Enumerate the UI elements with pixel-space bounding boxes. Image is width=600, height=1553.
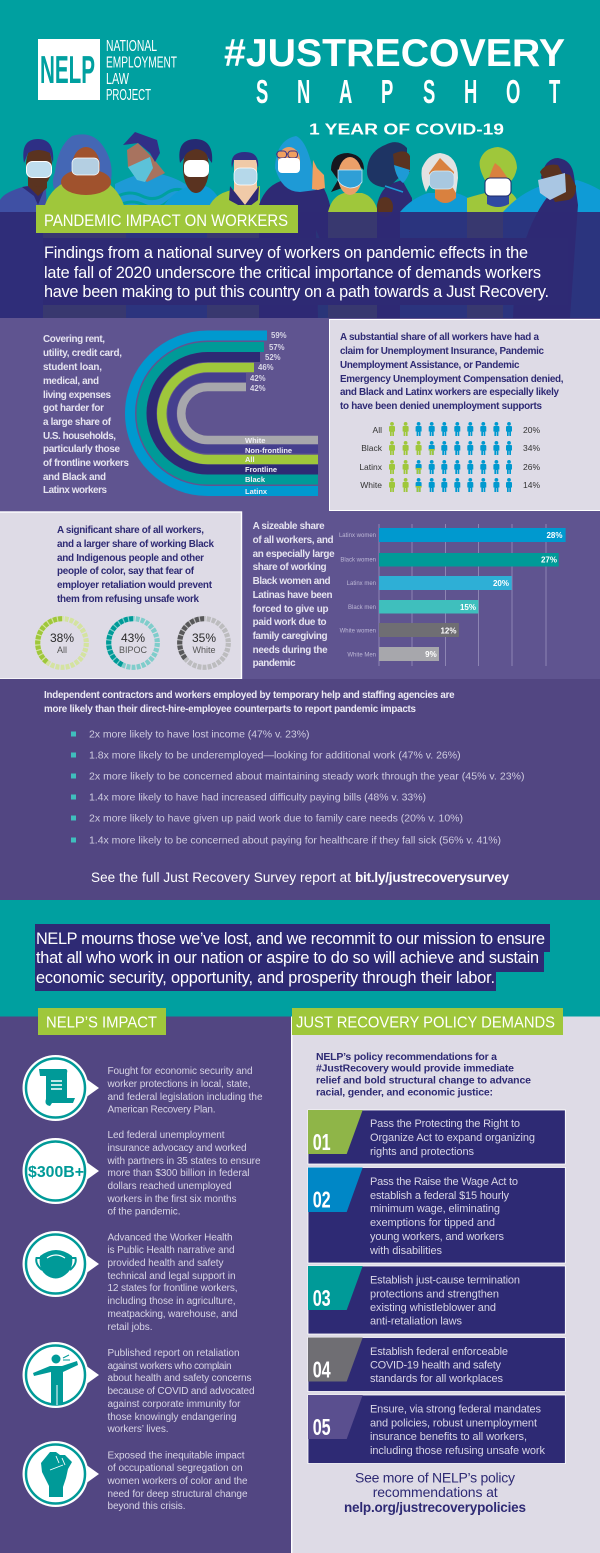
radial bar chart: Black <box>245 475 266 484</box>
text block: of frontline workers <box>43 458 130 469</box>
radial bar chart: 57% <box>269 343 285 352</box>
card 01: Organize Act to expand organizing <box>370 1132 535 1144</box>
text block: Advanced the Worker Health <box>108 1232 232 1244</box>
text block <box>57 525 214 605</box>
intro text: racial, gender, and economic justice: <box>316 1087 493 1099</box>
radial bar chart: 46% <box>258 363 274 372</box>
worker 3 <box>115 132 190 318</box>
logo: NELP: PROJECT <box>106 87 151 104</box>
text block: 12 states for frontline workers, <box>108 1283 238 1294</box>
section heading: pandemic impact on workers <box>36 205 298 233</box>
donut: all 38%: All <box>57 645 67 655</box>
panel: teal statement <box>0 900 600 1017</box>
card 02: Pass the Raise the Wage Act to <box>370 1176 518 1188</box>
header background <box>0 0 600 320</box>
bullet list: 1.8x more likely to be underemployed—looking for additional work (47% v. 26%) <box>89 750 461 762</box>
bar chart: Black men <box>348 605 376 611</box>
icon: raised fist <box>22 1441 99 1507</box>
panel: independent contractors <box>0 679 600 900</box>
pictogram chart: Latinx <box>359 462 383 472</box>
intro text box: have been making to put this country on a path towards a Just Recovery. <box>44 283 549 301</box>
subtitle: snapshot: P <box>381 73 393 110</box>
bar chart <box>339 524 566 666</box>
bar chart: White Men <box>347 652 376 658</box>
logo: NELP: NELP <box>40 49 95 92</box>
card 04: standards for all workplaces <box>370 1373 504 1385</box>
section heading: pandemic impact on workers: PANDEMIC IMPACT ON WORKERS <box>44 212 288 230</box>
bullet list: 2x more likely to have given up paid work due to family care needs (20% v. 10%) <box>89 812 463 824</box>
text block <box>106 1348 254 1435</box>
text block <box>253 521 335 669</box>
intro text <box>316 1051 531 1099</box>
subtitle: snapshot: H <box>464 73 477 110</box>
text block: against corporate immunity for <box>108 1399 241 1410</box>
pictogram chart <box>359 422 540 492</box>
survey link <box>91 870 509 885</box>
text block: Covering rent, <box>43 334 105 345</box>
subtitle: snapshot <box>256 73 561 110</box>
text block: utility, credit card, <box>43 348 122 359</box>
icon: scroll <box>22 1055 99 1121</box>
text block: and Black and Latinx workers are especially likely <box>340 387 560 398</box>
bar chart: 15% <box>460 603 476 612</box>
text block: employer retaliation would prevent <box>57 580 213 591</box>
bar chart: White women <box>340 628 376 634</box>
card 05: and policies, robust unemployment <box>370 1418 537 1430</box>
text block <box>106 1066 263 1116</box>
icon: face mask <box>22 1231 99 1297</box>
text block: needs during the <box>253 645 328 656</box>
card 03 <box>308 1266 565 1334</box>
text block <box>106 1450 248 1512</box>
donut: white 35%: 35% <box>192 631 216 645</box>
pictogram chart: 34% <box>523 443 540 453</box>
text block: women workers of color and the <box>106 1476 248 1487</box>
bar chart: 9% <box>425 650 437 659</box>
text block <box>106 1130 261 1218</box>
icon: worker speaking out <box>22 1342 99 1408</box>
heading <box>38 1008 166 1035</box>
text block: technical and legal support in <box>108 1271 236 1282</box>
survey link: bit.ly/justrecoverysurvey <box>355 870 509 885</box>
text block: more likely than their direct-hire-employee counterparts to report pandemic impacts <box>44 704 417 715</box>
subtitle: snapshot: A <box>339 73 352 110</box>
text block: Emergency Unemployment Compensation denied, <box>340 374 564 385</box>
card 04: 04 <box>313 1356 331 1382</box>
bar chart: 27% <box>541 556 557 564</box>
text block: with partners in 35 states to ensure <box>106 1156 261 1167</box>
text block: about health and safety concerns <box>108 1373 252 1384</box>
section backgrounds <box>0 318 600 679</box>
card 05 <box>308 1395 565 1464</box>
dark band over illustration <box>0 212 600 318</box>
text block: of all workers, and <box>253 535 334 546</box>
pictogram chart: 14% <box>523 480 540 490</box>
subtitle: snapshot: S <box>423 73 435 110</box>
text block <box>43 334 130 496</box>
icon: $300B+: $300B+ <box>28 1164 84 1181</box>
text block: A substantial share of all workers have had a <box>340 332 540 343</box>
text block: workers in the first six months <box>106 1194 236 1205</box>
text block: a large share of <box>43 417 112 428</box>
text block: people of color, say that fear of <box>57 566 195 577</box>
card 02: establish a federal $15 hourly <box>370 1190 510 1202</box>
card 05: Ensure, via strong federal mandates <box>370 1404 542 1416</box>
text block: living expenses <box>43 390 112 401</box>
radial bar chart: 52% <box>265 353 281 362</box>
worker 1 <box>0 139 53 318</box>
subtitle: snapshot: O <box>506 73 520 110</box>
text block: Black women and <box>253 576 331 587</box>
text block: Independent contractors and workers employed by temporary help and staffing agencies are <box>44 690 455 701</box>
card 02: young workers, and workers <box>370 1231 504 1243</box>
card 02: 02 <box>313 1186 331 1212</box>
worker 2 <box>43 134 126 318</box>
panel: expenses got harder <box>43 331 318 496</box>
card 05: 05 <box>313 1414 331 1440</box>
radial bar chart <box>130 331 318 496</box>
bar chart: Latinx men <box>347 581 376 587</box>
card 03: anti-retaliation laws <box>370 1316 462 1328</box>
text block: retail jobs. <box>108 1322 152 1333</box>
worker 6 <box>259 136 334 318</box>
card 02: with disabilities <box>369 1245 442 1257</box>
donut: white 35%: White <box>192 645 216 655</box>
text block: to have been denied unemployment supports <box>340 401 542 412</box>
text block: workers’ lives. <box>106 1424 168 1435</box>
heading: NELP’S IMPACT <box>46 1014 157 1032</box>
bar chart: 28% <box>546 531 562 540</box>
card 01: Pass the Protecting the Right to <box>370 1118 520 1130</box>
bar chart: Black women <box>340 558 376 564</box>
text block: Latinas have been <box>253 590 333 601</box>
card 03: Establish just-cause termination <box>370 1275 520 1287</box>
text block: Latinx workers <box>43 485 108 496</box>
policy link: See more of NELP’s policy <box>355 1470 515 1486</box>
panel: teal statement: economic security, opportunity, and prosperity through their labor. <box>36 969 495 987</box>
text block: and Black and <box>43 472 106 483</box>
bullet list: 2x more likely to be concerned about maintaining steady work through the year (45% v. 23%) <box>89 770 524 782</box>
radial bar chart: Frontline <box>245 465 277 474</box>
panel: teal statement: NELP mourns those we’ve lost, and we recommit to our mission to ensure <box>36 930 545 948</box>
text block: of the pandemic. <box>108 1206 180 1218</box>
text block: share of working <box>253 562 327 573</box>
panel: NELP's impact <box>0 1008 291 1553</box>
donut: BIPOC 43%: 43% <box>121 631 145 645</box>
text block: and federal legislation including the <box>108 1092 263 1103</box>
radial bar chart: White <box>245 436 265 445</box>
text block: an especially large <box>253 549 335 560</box>
card 02: exemptions for tipped and <box>370 1217 495 1229</box>
logo: NELP: NATIONAL <box>106 38 157 55</box>
donut: all 38%: 38% <box>50 631 74 645</box>
card 04: Establish federal enforceable <box>370 1346 508 1358</box>
text block: dollars reached unemployed <box>108 1181 232 1192</box>
bar chart: 12% <box>440 626 456 636</box>
intro text: NELP’s policy recommendations for a <box>316 1051 497 1063</box>
text block: family caregiving <box>253 631 328 642</box>
policy link: recommendations at <box>373 1484 498 1500</box>
card 05: including those refusing unsafe work <box>370 1445 546 1457</box>
text block <box>108 1232 238 1333</box>
title: #JUSTRECOVERY <box>224 32 565 75</box>
illustration: group of masked workers <box>0 132 600 318</box>
pictogram chart: 20% <box>523 425 540 435</box>
text block: student loan, <box>43 362 102 373</box>
text block: Unemployment Assistance, or Pandemic <box>340 360 520 371</box>
icon: $300B+ <box>22 1138 99 1204</box>
intro text: #JustRecovery would provide immediate <box>316 1063 514 1075</box>
intro text: relief and bold structural change to advance <box>316 1075 531 1087</box>
logo: NELP: LAW <box>106 71 130 88</box>
text block: worker protections in local, state, <box>106 1079 250 1090</box>
text block: them from refusing unsafe work <box>57 594 200 605</box>
text block: Fought for economic security and <box>108 1066 252 1077</box>
subheading: 1 year of covid: 1 YEAR OF COVID-19 <box>309 122 504 138</box>
text block: and a larger share of working Black <box>57 539 214 550</box>
radial bar chart: 59% <box>271 331 287 340</box>
radial bar chart: 42% <box>250 374 266 383</box>
card 04 <box>308 1338 565 1392</box>
bar chart: 20% <box>493 579 509 588</box>
text block: is Public Health narrative and <box>108 1245 234 1256</box>
policy link <box>344 1470 526 1515</box>
text block: more than $300 billion in federal <box>108 1168 250 1179</box>
text block: A sizeable share <box>253 521 325 532</box>
intro text box: Findings from a national survey of workers on pandemic effects in the <box>44 244 528 262</box>
card 03: existing whistleblower and <box>370 1302 496 1314</box>
survey link: See the full Just Recovery Survey report at <box>91 870 351 885</box>
text block: including those in agriculture, <box>108 1296 236 1307</box>
text block: paid work due to <box>253 617 327 628</box>
radial bar chart: 42% <box>250 384 266 393</box>
text block: claim for Unemployment Insurance, Pandemic <box>340 346 544 357</box>
donut: BIPOC 43%: BIPOC <box>119 645 147 655</box>
intro text box <box>43 238 568 305</box>
text block: Exposed the inequitable impact <box>108 1450 245 1462</box>
text block: particularly those <box>43 444 120 455</box>
card 01: rights and protections <box>370 1146 474 1158</box>
text block <box>340 332 564 412</box>
text block: U.S. households, <box>43 431 116 442</box>
pictogram chart: 26% <box>523 462 540 472</box>
worker 10 <box>467 147 519 318</box>
text block: American Recovery Plan. <box>108 1104 216 1116</box>
text block: medical, and <box>43 376 99 387</box>
bar chart: Latinx women <box>339 533 376 539</box>
text block: provided health and safety <box>108 1258 224 1269</box>
text block: Published report on retaliation <box>108 1348 240 1359</box>
worker 9 <box>400 153 483 318</box>
panel: unemployment denied <box>330 320 600 510</box>
text block: Led federal unemployment <box>108 1130 225 1141</box>
card 01 <box>308 1110 565 1164</box>
radial bar chart: Non-frontline <box>245 446 292 455</box>
worker 7 <box>328 153 378 318</box>
card 03: 03 <box>313 1285 331 1311</box>
panel: fear of retaliation <box>0 512 242 679</box>
text block: against workers who complain <box>108 1361 232 1372</box>
bullet list: 1.4x more likely to have had increased difficulty paying bills (48% v. 33%) <box>89 792 426 804</box>
card 03: protections and strengthen <box>370 1288 499 1300</box>
donut: BIPOC 43% <box>109 619 157 667</box>
card 02 <box>308 1168 565 1263</box>
radial bar chart: Latinx <box>245 487 268 496</box>
heading: JUST RECOVERY POLICY DEMANDS <box>296 1014 555 1032</box>
donut: white 35% <box>180 619 228 667</box>
text block: A significant share of all workers, <box>57 525 204 536</box>
logo: NELP <box>38 38 177 104</box>
subtitle: snapshot: N <box>297 73 310 110</box>
text block: meatpacking, warehouse, and <box>108 1309 238 1320</box>
text block: those knowingly endangering <box>108 1412 236 1423</box>
card 01: 01 <box>313 1129 331 1155</box>
panel: just recovery policy demands <box>291 1008 600 1553</box>
text block: and Indigenous people and other <box>57 553 204 564</box>
text block: pandemic <box>253 658 296 669</box>
pictogram chart: White <box>360 480 382 490</box>
pictogram chart: All <box>373 425 382 435</box>
text block: beyond this crisis. <box>108 1501 186 1512</box>
worker 11 <box>503 158 600 318</box>
intro text box: late fall of 2020 underscore the critical importance of demands workers <box>44 264 541 282</box>
text block: need for deep structural change <box>108 1489 248 1500</box>
card 05: insurance benefits to all workers, <box>370 1431 527 1443</box>
worker 5 <box>207 152 260 318</box>
worker 4 <box>160 139 224 318</box>
bullet list: 2x more likely to have lost income (47% v. 23%) <box>89 728 310 740</box>
panel: caregiving <box>253 521 566 669</box>
donut: all 38% <box>38 619 86 667</box>
text block: of occupational segregation on <box>108 1463 242 1474</box>
logo: NELP: EMPLOYMENT <box>106 54 177 72</box>
subtitle: snapshot: T <box>549 73 561 110</box>
text block: forced to give up <box>253 604 329 615</box>
policy link: nelp.org/justrecoverypolicies <box>344 1500 526 1515</box>
card 04: COVID-19 health and safety <box>370 1360 502 1372</box>
subtitle: snapshot: S <box>256 73 268 110</box>
card 02: minimum wage, eliminating <box>370 1203 500 1215</box>
bullet list: 1.4x more likely to be concerned about paying for healthcare if they fall sick (56% v. 41%) <box>89 834 501 846</box>
panel: teal statement: that all who work in our nation or aspire to do so will achieve and sustain <box>36 949 539 967</box>
pictogram chart: Black <box>361 443 383 453</box>
heading <box>292 1008 563 1035</box>
bullet list <box>71 728 524 846</box>
worker 8 <box>367 142 412 318</box>
text block: got harder for <box>43 403 104 414</box>
text block: insurance advocacy and worked <box>108 1143 246 1154</box>
radial bar chart: All <box>245 455 255 464</box>
text block: because of COVID and advocated <box>108 1386 254 1397</box>
